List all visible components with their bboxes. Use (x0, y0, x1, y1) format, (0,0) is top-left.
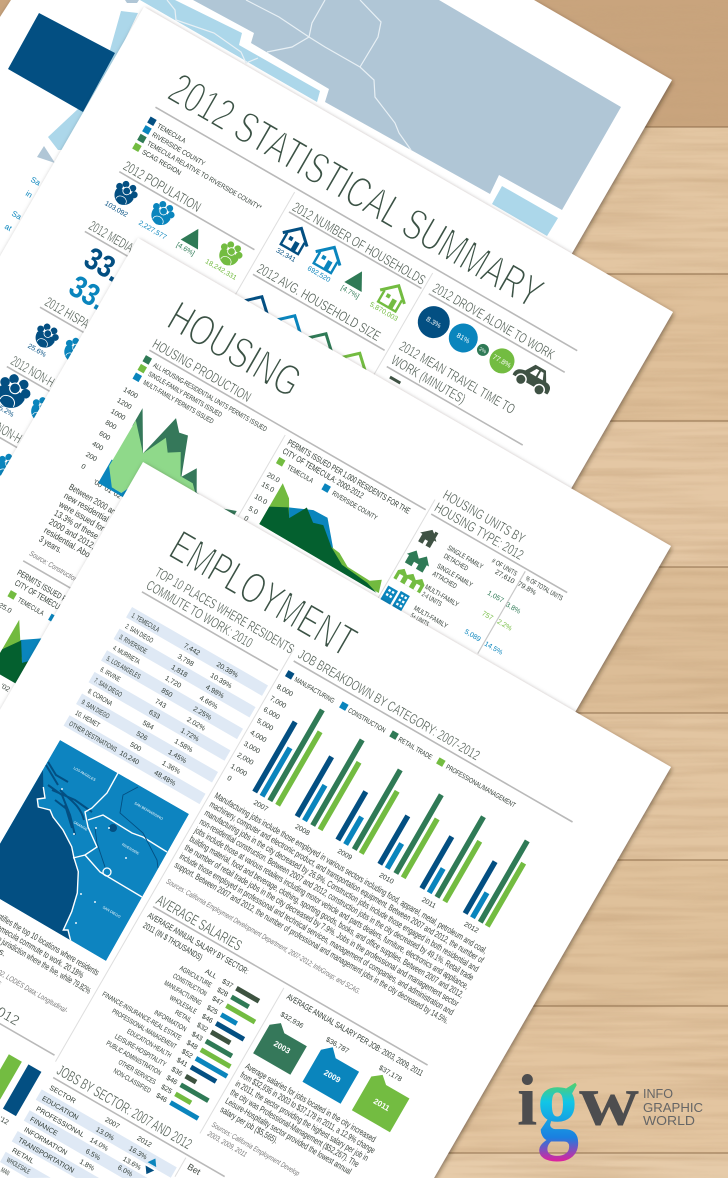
labels: housing types: MULTI-FAMILY (412, 605, 449, 630)
table: top 10 commute destinations: 10,240 (118, 750, 140, 767)
circles: drove alone: 8.3% (425, 316, 442, 330)
subheading: salary per job: AVERAGE ANNUAL SALARY PER JOB: 2003, 2009, 2011 (285, 991, 425, 1078)
big numbers: median age (62, 240, 141, 324)
chart axis: housing production: 1000 (109, 408, 126, 422)
bar chart: salary by sector: INFORMATION (153, 1009, 187, 1033)
big numbers: median age: 33.8 (63, 268, 125, 324)
table: top 10 commute destinations: 2.02% (185, 717, 206, 733)
heading: number of households: 2012 NUMBER OF HOUSEHOLDS (290, 199, 429, 288)
bar chart: salary by sector: RETAIL (173, 1009, 193, 1024)
heading: average salaries (153, 892, 436, 1065)
area chart: second chart (0, 620, 45, 695)
icon fragment: travel (389, 376, 401, 384)
bar chart: salary by sector: WHOLESALE (168, 995, 198, 1016)
paragraph: salaries (219, 1061, 378, 1176)
heading: top 10 places: COMMUTE TO WORK: 2010 (144, 577, 256, 651)
table: top 10 commute destinations: OTHER DESTINATIONS (68, 721, 118, 754)
subheading: salary by sector: AVERAGE ANNUAL SALARY BY SECTOR: (146, 910, 251, 976)
heading: top 10 places: TOP 10 PLACES WHERE RESIDENTS (152, 564, 297, 657)
labels: housing types: SINGLE FAMILY (446, 545, 484, 571)
chart axis: housing production: 400 (90, 441, 104, 453)
icon row: population (103, 176, 252, 282)
table: top 10 commute destinations: 7. SAN DIEGO (93, 677, 123, 699)
heading: drove alone: 2012 DROVE ALONE TO WORK (430, 280, 558, 363)
icon row: non-hispanic (0, 369, 61, 436)
bar chart: job breakdown: 2012 (462, 921, 480, 935)
table: units (448, 554, 565, 677)
paragraph: jobs: manufacturing jobs in the city decreased by 26.9%. Construction jobs include those engaged in both residential and (203, 808, 481, 974)
icon row: households: 692,520 (306, 265, 331, 284)
icon row: households: [4.7%] (339, 285, 360, 301)
bar chart: salary by sector: FINANCE-INSURANCE-REAL ESTATE (101, 991, 182, 1042)
bar chart: salary by sector: $46 (154, 1092, 168, 1104)
heading: housing units by type: HOUSING TYPE: 2012 (432, 499, 527, 563)
chart axis: housing production: '00 (92, 479, 103, 490)
text fragments on back page: Sa (10, 209, 23, 222)
chart axis: job breakdown: 3,000 (242, 741, 261, 756)
source: jobs: Sources: California Employment Development Department, 2007-2012; InfoGroup; and SCAG. (165, 877, 362, 996)
heading: mean travel time: WORK (MINUTES) (389, 351, 468, 407)
chart axis: housing production: 0 (80, 463, 87, 471)
table: top 10 commute destinations: 850 (160, 687, 173, 699)
table: top 10 commute destinations: 584 (141, 720, 155, 732)
heading: average household size: 2012 AVG. HOUSEHOLD SIZE (254, 260, 384, 344)
paragraph: map caption (0, 894, 103, 1005)
table: jobs by sector: 13.6% (121, 1156, 142, 1172)
area chart: housing production (94, 401, 262, 557)
table: top 10 commute destinations: 3,798 (176, 653, 195, 668)
legend: permits: TEMECULA (286, 464, 314, 485)
heading: 2012 population (119, 157, 263, 250)
icon: house 2009: $36,787 (324, 1036, 350, 1055)
table: jobs by sector: 16.3% (127, 1145, 148, 1161)
subheading: salary by sector: 2011 (IN $ THOUSANDS) (141, 920, 205, 962)
legend: job breakdown: PROFESSIONAL/MANAGEMENT (444, 764, 517, 810)
paragraph: salaries: salary per job ($5,565). (219, 1104, 280, 1146)
heading: hispanic (40, 292, 170, 377)
icon: attached houses (403, 547, 433, 574)
paragraph: jobs: the number of retail trade jobs in the city decreased by 7.9%. Jobs in the professional and management sector (183, 842, 461, 1009)
table: jobs by sector: RETAIL (11, 1147, 35, 1165)
bars: jobs chart (0, 1053, 41, 1128)
chart axis: permits: 0 (242, 515, 249, 523)
heading: housing production: HOUSING PRODUCTION (150, 336, 254, 405)
table: top 10 commute destinations (64, 607, 268, 804)
big numbers: median age: 33.1 (78, 240, 140, 296)
table: top 10 commute destinations: 20.38% (215, 661, 239, 679)
title: HOUSING (160, 292, 310, 407)
icon row: hispanic (25, 318, 91, 376)
paragraph: housing: 2000 and 2012, permits issued for the city's (47, 516, 177, 597)
chart axis: job breakdown: 6,000 (262, 706, 281, 721)
paragraph: salaries: Average salaries for jobs located in the city increased (244, 1061, 378, 1144)
heading: permits per 1000: PERMITS ISSUED PER 1,000 RESIDENTS FOR THE (286, 437, 412, 516)
icon row: households: 5,870,003 (368, 301, 399, 323)
labels: housing types: SINGLE FAMILY (435, 563, 474, 589)
bar chart: job breakdown: 2011 (420, 897, 437, 910)
legend: RIVERSIDE COUNTY (150, 132, 206, 168)
icon: house 2003: 2003 (272, 1039, 292, 1056)
table: top 10 commute destinations: 2.25% (192, 706, 212, 722)
legend: housing production (132, 355, 269, 451)
paragraph: jobs: include those employed in professional and technical services, management of companies, and administration and (178, 851, 456, 1017)
icon: car (509, 357, 557, 400)
legend: housing production: MULTI-FAMILY PERMITS ISSUED (142, 380, 214, 426)
icon: house 2011: 2011 (372, 1097, 392, 1113)
bar chart: salary by sector (70, 930, 269, 1124)
heading: permits second chart: PERMITS ISSUED PER 1,000 (16, 567, 90, 616)
bar chart: salary by sector: ALL (203, 968, 218, 981)
paragraph: housing: were issued for 8,746 housing units in total, (57, 499, 187, 580)
paragraph fragment: jobs by sector: Bet (186, 1162, 203, 1177)
icon: detached house (416, 525, 441, 549)
bar chart: salary by sector: NON-CLASSIFIED (112, 1068, 152, 1095)
panel: housing page (0, 238, 671, 1031)
table: top 10 commute destinations: 4.98% (204, 684, 225, 700)
table: units: 5,089 (463, 629, 482, 643)
table: units: % OF TOTAL UNITS (524, 575, 564, 603)
table: units: # OF UNITS (490, 558, 518, 578)
logo: infographic world: i (517, 1060, 537, 1141)
map: commuter region (0, 740, 189, 961)
chart axis: permits (241, 472, 281, 527)
chart axis: housing production: 200 (84, 451, 98, 463)
panel: statistical summary page (0, 7, 673, 797)
heading: non-hispanic: 2012 NON-HISPANIC (8, 352, 85, 406)
icon row: population: 18,242,331 (204, 258, 238, 282)
paragraph: jobs: Manufacturing jobs include those employed in various sectors including food, apparel, metal, petroleum and coal, (213, 790, 489, 956)
table: top 10 commute destinations: 7,442 (182, 643, 201, 657)
heading: housing production (149, 336, 434, 510)
paragraph: housing: residential. About half of them within the past (42, 525, 178, 609)
table: jobs by sector: FINANCE (29, 1116, 59, 1138)
heading: jobs chart (0, 950, 64, 1055)
icon: house 2011 (352, 1064, 417, 1132)
circles: drove alone (412, 300, 521, 381)
table: top 10 commute destinations: 1,720 (163, 675, 182, 690)
heading: 2012 population: 2012 POPULATION (121, 158, 204, 215)
heading: number of households (289, 198, 429, 288)
chart axis: job breakdown: 1,000 (229, 763, 248, 778)
table: top 10 commute destinations: 1. TEMECULA (130, 612, 161, 634)
icon: house 2003 (253, 1009, 316, 1075)
chart axis: permits: 10.0 (253, 493, 268, 506)
bar chart: job breakdown: 2009 (336, 848, 353, 862)
legend: job breakdown (284, 670, 518, 810)
heading: drove alone (429, 279, 573, 372)
chart axis: job breakdown (223, 684, 294, 788)
table: top 10 commute destinations: 633 (147, 709, 161, 721)
table: jobs by sector: 14.0% (88, 1137, 109, 1153)
icon row: population: [4.6%] (175, 242, 196, 258)
logo: infographic world: GRAPHIC (643, 1101, 703, 1115)
source: salaries: 2003, 2009, 2011 (205, 1129, 249, 1159)
paragraph: housing: Between 2000 and 2012, 12,345 permits for (67, 482, 186, 556)
map: roads (167, 0, 411, 150)
table: top 10 commute destinations: 1.58% (173, 738, 194, 754)
legend: job breakdown: CONSTRUCTION (347, 707, 386, 734)
bar chart: salary by sector: $36 (170, 1066, 183, 1078)
chart axis: job breakdown: 0 (226, 775, 233, 783)
labels: housing types: 2-4 UNITS (420, 591, 443, 608)
table: top 10 commute destinations: 1,818 (170, 664, 188, 679)
bar chart: salary by sector: MANUFACTURING (163, 980, 202, 1007)
map: commuter region: SAN BERNARDINO (133, 801, 164, 821)
table: units: 79.8% (516, 581, 537, 597)
panel: back map page (0, 0, 672, 378)
bar chart: salary by sector: $28 (215, 987, 229, 999)
labels: housing types: DETACHED (442, 553, 469, 573)
legend (131, 116, 273, 221)
subheading: salary by sector (141, 910, 251, 986)
icon: people fragment (0, 450, 24, 483)
bar chart: salary by sector: $48 (185, 1040, 199, 1052)
map: light blue strip (140, 0, 320, 102)
table: jobs by sector: INFORMATION (23, 1127, 68, 1157)
bar chart: salary by sector: OTHER SERVICES (117, 1059, 157, 1086)
map: grey-blue land (193, 0, 621, 210)
logo: infographic world: w (579, 1060, 639, 1141)
icon: apartment building (380, 584, 410, 611)
table: jobs by sector: PROFESSIONAL (35, 1106, 85, 1139)
chart axis: permits: 15.0 (260, 481, 275, 494)
chart axis: job breakdown: 7,000 (268, 695, 287, 710)
title: 2012 STATISTICAL SUMMARY (160, 64, 551, 318)
chart axis: job breakdown: 8,000 (275, 684, 294, 698)
logo: infographic world (517, 1042, 703, 1161)
table: jobs by sector: EDUCATION (41, 1095, 79, 1122)
table: jobs by sector: 2012 (136, 1135, 153, 1149)
bar chart: salary by sector: $47 (210, 995, 224, 1007)
icon row: hispanic: 25.6% (26, 343, 47, 359)
paragraph: housing: 3 years. (37, 534, 64, 555)
heading: average household size (253, 260, 393, 350)
labels: housing types: 5+ UNITS (409, 612, 430, 629)
legend: housing production: SINGLE-FAMILY PERMITS ISSUED (147, 371, 223, 419)
table: jobs by sector: 6.5% (84, 1148, 101, 1162)
table: units: 14.5% (483, 641, 504, 657)
text fragments on back page (3, 175, 42, 233)
heading: job breakdown: JOB BREAKDOWN BY CATEGORY: 2007-2012 (296, 646, 483, 763)
legend: second chart: TEMECULA (16, 597, 45, 618)
heading: permits second chart: CITY OF TEMECULA: 2000-2012 (13, 578, 96, 631)
map: small grey shapes (37, 0, 139, 163)
table: top 10 commute destinations: 6. IRVINE (99, 667, 122, 684)
table: units: 1,057 (486, 590, 505, 605)
table: units: 757 (480, 610, 494, 622)
paragraph: housing: 13.3% of these were multi-family units; from (52, 508, 182, 588)
text fragments on back page: at (3, 222, 14, 233)
paragraph: jobs: building material, food and beverage, clothing, sporting goods, books, and office supplies. Between 2007 and 2012, (188, 834, 466, 1000)
bar chart: salary by sector: $25 (159, 1084, 173, 1096)
paragraph: jobs: machinery, computer and electronic product, and transportation equipment. Between 2007 and 2012, the number of (208, 799, 486, 965)
bar chart: salary by sector: CONSTRUCTION (171, 973, 208, 998)
chart axis: housing production: '01 (102, 485, 113, 495)
area chart: permits (259, 483, 402, 594)
icon: house 2003: $32,936 (279, 1011, 304, 1030)
map: light blue left shape (48, 11, 138, 150)
legend: second chart (7, 590, 58, 624)
icon row: population: 2,227,577 (137, 220, 168, 241)
legend: TEMECULA (155, 123, 187, 145)
table: units: 2.2% (496, 619, 513, 633)
text fragments on back page: in (24, 189, 34, 200)
logo: infographic world: g (537, 1042, 579, 1161)
icon row: households (272, 221, 413, 323)
bar chart: salary by sector: PUBLIC ADMINISTRATION (105, 1040, 162, 1077)
heading: hispanic: 2012 HISPANIC (42, 293, 106, 339)
legend: job breakdown: MANUFACTURING (293, 676, 335, 705)
chart axis: housing production: '02 (111, 490, 122, 501)
table: jobs by sector: 13.0% (94, 1126, 115, 1142)
legend: SCAG REGION (140, 149, 182, 177)
bar chart: job breakdown: 2010 (378, 872, 395, 886)
bar chart: salary by sector: $46 (200, 1013, 214, 1025)
bar chart: salary by sector: $52 (180, 1048, 194, 1060)
labels: housing types: MULTI-FAMILY (423, 584, 460, 609)
bar chart: job breakdown (246, 700, 542, 939)
table: top 10 commute destinations: 10.39% (209, 672, 233, 690)
icon row: population: 103,092 (103, 200, 129, 219)
bar chart: salary by sector: $37 (220, 978, 234, 990)
table: jobs by sector (0, 1085, 177, 1178)
chart axis: housing production: 600 (98, 430, 111, 442)
table: top 10 commute destinations: 1.45% (167, 749, 187, 765)
text fragments on back page: Sa (29, 175, 42, 188)
bar chart: salary by sector: $46 (165, 1075, 178, 1087)
chart axis: housing production: 800 (104, 419, 118, 431)
section: employment lower left content (0, 558, 294, 1132)
icon: house 2009 (302, 1036, 367, 1104)
table: jobs by sector: 1.8% (78, 1159, 95, 1173)
table: top 10 commute destinations: 1.72% (179, 727, 200, 743)
table: units: 3.8% (504, 602, 522, 616)
table: top 10 commute destinations: 500 (128, 741, 142, 753)
heading: average salaries: AVERAGE SALARIES (153, 892, 245, 955)
chart axis: housing production: 1400 (122, 387, 139, 400)
heading: mean travel time: 2012 MEAN TRAVEL TIME TO (397, 338, 518, 417)
bar chart: salary by sector: EDUCATION-HEALTH (125, 1028, 172, 1059)
heading: permits per 1000: CITY OF TEMECULA: 2000-2012 (281, 446, 366, 501)
table: top 10 commute destinations: 526 (135, 731, 148, 743)
labels: housing types: ATTACHED (431, 571, 458, 590)
chart axis: job breakdown: 2,000 (236, 752, 254, 767)
table: top 10 commute destinations: 10. HEMET (74, 710, 101, 730)
heading: housing units by type: HOUSING UNITS BY (440, 486, 528, 547)
table: top 10 commute destinations: 1.36% (160, 760, 181, 776)
bar chart: salary by sector: $25 (205, 1005, 219, 1016)
chart axis: permits: 20.0 (265, 472, 281, 485)
source: map (0, 936, 70, 1023)
legend: TEMECULA RELATIVE TO RIVERSIDE COUNTY* (145, 140, 263, 212)
bar chart: salary by sector: AGRICULTURE (178, 965, 213, 989)
table: top 10 commute destinations: 743 (153, 698, 167, 710)
map: commuter region: ORANGE (73, 821, 89, 832)
table: jobs by sector: SECTOR (48, 1085, 77, 1105)
bar chart: salary by sector: PROFESSIONAL-MANAGEMENT (111, 1008, 178, 1051)
icon: house 2011: $37,178 (377, 1065, 403, 1083)
legend: job breakdown: RETAIL TRADE (397, 736, 433, 762)
legend: permits (275, 457, 379, 522)
circles: drove alone: 77.8% (491, 354, 512, 370)
bar chart: job breakdown: 2008 (294, 823, 311, 837)
table: top 10 commute destinations: 4.66% (198, 695, 219, 711)
labels: housing types (407, 545, 484, 638)
map: commuter region: RIVERSIDE (121, 843, 140, 856)
table: top 10 commute destinations: 9. SAN DIEGO (80, 699, 111, 721)
panel: employment page (0, 462, 671, 1178)
source: construction: Source: Construction Industry Research Board (28, 549, 137, 617)
map: light blue corner (492, 186, 558, 236)
table: jobs by sector: 2007 (104, 1117, 121, 1131)
paragraph: jobs: support. Between 2007 and 2012, the number of professional and management jobs in the city decreased by 14.5%. (173, 860, 451, 1026)
chart axis: job breakdown: 5,000 (255, 718, 274, 733)
bar chart: salary by sector: LEISURE-HOSPITALITY (113, 1033, 167, 1069)
paragraph: jobs: non-residential construction. Between 2007 and 2012, construction jobs in the city decreased by 49.1%. Retail trade (198, 816, 476, 983)
bar chart: salary by sector: $32 (195, 1022, 209, 1034)
table: top 10 commute destinations: 4. MURRIETA (111, 645, 141, 666)
table: top 10 commute destinations: 3. RIVERSIDE (118, 634, 148, 656)
circles: drove alone: 81% (455, 332, 471, 345)
paragraph: jobs (172, 790, 491, 1026)
logo: infographic world: WORLD (643, 1114, 695, 1128)
table: jobs by sector: TRANSPORTATION (17, 1137, 75, 1175)
map: commuter region: SAN DIEGO (102, 905, 121, 919)
icon row: households: 32,341 (275, 247, 297, 264)
chart axis: housing production (74, 386, 170, 501)
table: top 10 commute destinations: 48.48% (153, 770, 177, 788)
paragraph: housing (37, 481, 203, 618)
bar chart: salary by sector: $43 (190, 1031, 204, 1043)
chart axis: housing production: 1200 (115, 397, 133, 411)
legend: housing production: ALL HOUSING-RESIDENTIAL UNITS PERMITS ISSUED (152, 362, 268, 433)
section: employment upper content (0, 519, 606, 1134)
icon: multi-family (393, 566, 427, 593)
title: EMPLOYMENT (162, 521, 364, 667)
paragraph: housing: new residential units in the city of Temecula (62, 490, 192, 571)
table: top 10 commute destinations: 8. CORONA (86, 688, 113, 708)
map: commuter region: LOS ANGELES (73, 766, 97, 782)
bar chart: job breakdown: 2007 (252, 799, 269, 813)
chart axis: permits: 5.0 (247, 506, 259, 517)
chart axis: job breakdown: 4,000 (249, 729, 267, 744)
map: navy block (8, 13, 115, 112)
circles: drove alone: 2% (478, 346, 488, 355)
icon: house 2009: 2009 (322, 1068, 343, 1085)
bar chart: salary by sector: $41 (175, 1057, 189, 1069)
table: top 10 commute destinations: 5. LOS ANGELES (105, 656, 142, 681)
heading: median age: 2012 MEDIAN AGE (86, 217, 159, 269)
table: units: 27,610 (493, 569, 516, 586)
logo: infographic world: INFO (643, 1087, 673, 1101)
legend: permits: RIVERSIDE COUNTY (331, 490, 378, 522)
icon row: household size (238, 290, 372, 381)
paragraph: jobs: jobs include those at various retailers including motor vehicle and parts dealers, furniture, electronics and appliance, (192, 825, 471, 991)
table: top 10 commute destinations: 2. SAN DIEGO (124, 623, 154, 645)
